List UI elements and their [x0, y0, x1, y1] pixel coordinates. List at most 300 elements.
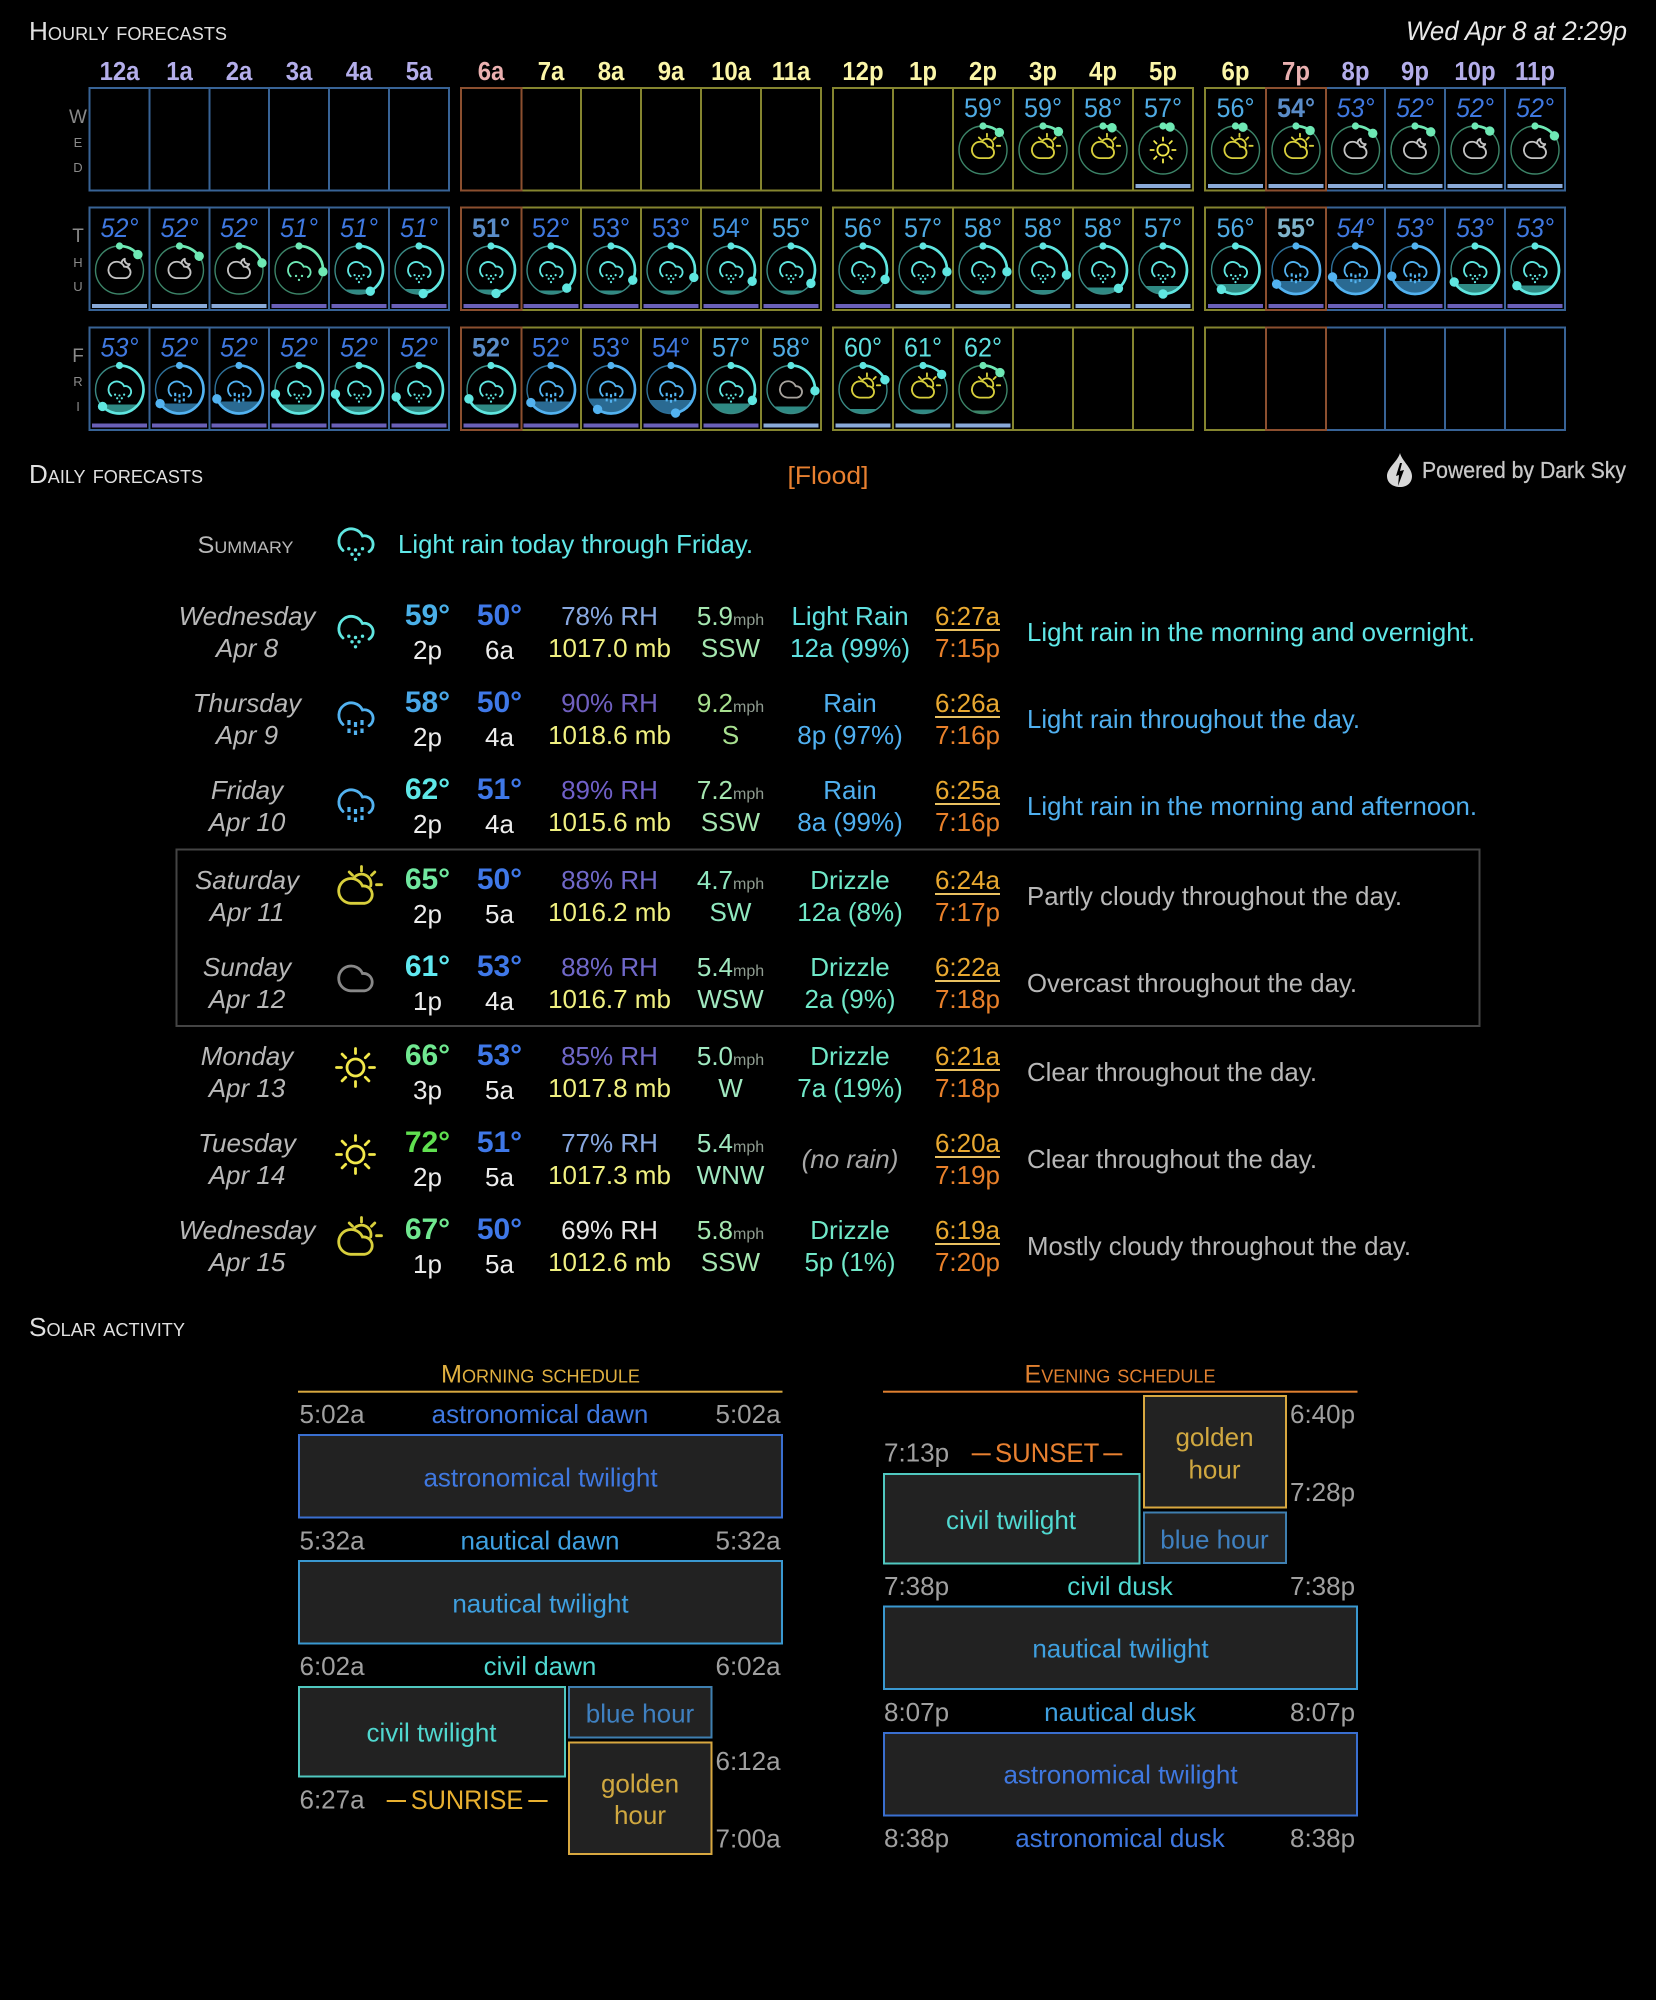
- hour cell: Thu 2a 52°: [212, 212, 268, 308]
- panel: morning schedule: astronomical dawn: [432, 1399, 648, 1429]
- daily row: Wednesday Apr 8: Apr 8: [214, 633, 279, 663]
- hour labels: 5a: [406, 57, 433, 86]
- hour cell: Thu 1p 57°: 57°: [904, 212, 942, 243]
- hour cell: Thu 7a 52°: [524, 212, 578, 308]
- daily row: Thursday Apr 9: Apr 9: [214, 720, 278, 750]
- hour cell: Wed 3p 59°: [1019, 92, 1067, 174]
- hour cell: Fri 1a 52°: [152, 332, 207, 428]
- hour cell: Wed 4p 58°: [1079, 92, 1127, 174]
- daily row: Wednesday Apr 15: 5p (1%): [804, 1247, 896, 1277]
- daily row: Tuesday Apr 14: 51°: [477, 1126, 522, 1159]
- hourly cells: Friday: [92, 332, 1010, 428]
- hour cell: Thu 8a 53°: 53°: [592, 212, 630, 243]
- hour cell: Thu 11a 55°: [764, 212, 818, 308]
- daily row: Thursday Apr 9: 4a: [485, 722, 514, 752]
- daily row: Sunday Apr 12: WSW: [697, 984, 764, 1014]
- daily row: Sunday Apr 12: 6:22a: [935, 952, 1001, 982]
- daily row: Sunday Apr 12: 1016.7 mb: [548, 984, 671, 1014]
- panel: morning schedule: 6:12a: [716, 1746, 781, 1776]
- daily row: Saturday Apr 11: [195, 863, 1402, 929]
- hour cell: Thu 7p 55°: [1268, 212, 1324, 308]
- panel: morning schedule: 5:32a: [716, 1525, 781, 1555]
- hour labels: 2a: [226, 57, 253, 86]
- powered by Dark Sky badge: Powered by Dark Sky: [1422, 457, 1626, 483]
- hour cell: Fri 11a 58°: 58°: [772, 332, 810, 363]
- hour cell: Thu 10a 54°: [704, 212, 759, 308]
- heading: daily forecasts: Daily forecasts: [29, 459, 203, 489]
- hour labels: 1a: [166, 57, 194, 86]
- daily row: Sunday Apr 12: Apr 12: [207, 984, 286, 1014]
- hour cell: Wed 5p 57°: [1136, 92, 1190, 188]
- panel: evening schedule: astronomical dusk: [1015, 1823, 1226, 1853]
- panel: morning schedule: nautical dawn: [460, 1525, 620, 1555]
- box: blue hour: [569, 1687, 712, 1738]
- daily row: Thursday Apr 9: 90% RH: [561, 688, 658, 718]
- day label: THU: U: [73, 279, 83, 294]
- daily row: Wednesday Apr 15: 69% RH: [561, 1215, 658, 1245]
- hour labels: 8a: [598, 57, 625, 86]
- daily row: Sunday Apr 12: 2a (9%): [804, 984, 896, 1014]
- panel: morning schedule: 6:27a: [300, 1784, 365, 1814]
- panel: evening schedule: civil dusk: [1067, 1571, 1174, 1601]
- daily row: Saturday Apr 11: Partly cloudy throughout the day.: [1027, 881, 1402, 911]
- daily row: Thursday Apr 9: Light rain throughout the day.: [1027, 704, 1360, 734]
- box: nautical twilight: [884, 1606, 1357, 1689]
- hour cell: Thu 3p 58°: 58°: [1024, 212, 1062, 243]
- day label: FRI: R: [73, 374, 83, 389]
- daily row: Saturday Apr 11: 65°: [405, 863, 450, 896]
- daily row: Saturday Apr 11: Apr 11: [208, 897, 284, 927]
- hour cell: Thu 11a 55°: 55°: [772, 212, 810, 243]
- hour cell: Fri 12a 53°: [92, 332, 147, 428]
- day label: WED: D: [73, 160, 83, 175]
- daily row: Wednesday Apr 15: 1012.6 mb: [548, 1247, 671, 1277]
- box: blue hour: [1144, 1512, 1286, 1563]
- hour cell: Wed 2p 59°: 59°: [964, 92, 1002, 123]
- day label: WED: E: [74, 135, 83, 150]
- daily row: Saturday Apr 11: 2p: [413, 899, 442, 929]
- daily row: Wednesday Apr 8: 6:27a: [935, 601, 1001, 631]
- hour cell: Thu 6a 51°: [464, 212, 518, 308]
- daily row: Thursday Apr 9: 9.2mph: [697, 688, 764, 718]
- hour cell: Wed 11p 52°: [1508, 92, 1562, 188]
- hour cell: Thu 4a 51°: [332, 212, 386, 308]
- panel: morning schedule: [298, 1361, 782, 1854]
- hour labels: 2p: [969, 57, 997, 86]
- panel: evening schedule: 6:40p: [1290, 1399, 1355, 1429]
- box: astronomical twilight: astronomical twilight: [1003, 1759, 1238, 1789]
- day label: THU: H: [73, 255, 83, 270]
- hour cell: Fri 3a 52°: 52°: [280, 332, 318, 363]
- daily row: Wednesday Apr 15: [179, 1213, 1411, 1279]
- hour cell: Wed 9p 52°: [1388, 92, 1442, 188]
- hour cell: Fri 11a 58°: [764, 332, 820, 428]
- hour cell: Fri 10a 57°: [704, 332, 759, 428]
- hourly grid: Wednesday row: [90, 88, 1565, 190]
- daily row: Thursday Apr 9: 1018.6 mb: [548, 720, 671, 750]
- hour cell: Fri 8a 53°: [584, 332, 638, 428]
- daily row: Tuesday Apr 14: 72°: [405, 1126, 450, 1159]
- hour cell: Thu 12a 52°: 52°: [101, 212, 138, 243]
- daily row: Thursday Apr 9: 6:26a: [935, 688, 1001, 718]
- daily row: Friday Apr 10: Apr 10: [207, 807, 286, 837]
- daily row: Sunday Apr 12: 1p: [413, 986, 442, 1016]
- daily row: Monday Apr 13: 5.0mph: [697, 1041, 764, 1071]
- daily row: Tuesday Apr 14: 5.4mph: [697, 1128, 764, 1158]
- hour cell: Thu 8a 53°: [584, 212, 639, 308]
- hour cell: Fri 9a 54°: 54°: [652, 332, 690, 363]
- hour cell: Wed 10p 52°: [1448, 92, 1502, 188]
- daily row: Wednesday Apr 8: 50°: [477, 599, 522, 632]
- daily row: Thursday Apr 9: Rain: [823, 688, 877, 718]
- daily row: Friday Apr 10: Rain: [823, 775, 877, 805]
- day label: FRI: I: [76, 399, 80, 414]
- daily row: Sunday Apr 12: Overcast throughout the day.: [1027, 968, 1357, 998]
- daily row: Thursday Apr 9: 7:16p: [935, 720, 1000, 750]
- box: golden hour: golden: [1175, 1422, 1254, 1452]
- hour cell: Thu 11p 53°: [1508, 212, 1562, 308]
- daily row: Tuesday Apr 14: Clear throughout the day.: [1027, 1144, 1317, 1174]
- hour cell: Wed 3p 59°: 59°: [1024, 92, 1062, 123]
- daily row: Monday Apr 13: 66°: [405, 1039, 450, 1072]
- hour cell: Fri 5a 52°: [390, 332, 446, 428]
- daily row: Saturday Apr 11: SW: [710, 897, 752, 927]
- hour labels: 9p: [1401, 57, 1429, 86]
- hour cell: Fri 7a 52°: 52°: [532, 332, 570, 363]
- box: astronomical twilight: astronomical twilight: [423, 1463, 658, 1493]
- hour cell: Wed 6p 56°: [1208, 92, 1263, 188]
- hour cell: Thu 8p 54°: [1327, 212, 1383, 308]
- daily row: Wednesday Apr 15: 6:19a: [935, 1215, 1001, 1245]
- hour labels: 11a: [772, 57, 811, 86]
- hour cell: Thu 6p 56°: 56°: [1217, 212, 1254, 243]
- daily row: Tuesday Apr 14: 2p: [413, 1162, 442, 1192]
- hour cell: Thu 9a 53°: [644, 212, 700, 308]
- hour cell: Wed 8p 53°: 53°: [1337, 92, 1374, 123]
- daily row: Tuesday Apr 14: 7:19p: [935, 1160, 1000, 1190]
- morning heading: Morning schedule: [441, 1361, 640, 1389]
- daily row: Friday Apr 10: 6:25a: [935, 775, 1001, 805]
- hour labels: 10p: [1454, 57, 1496, 86]
- hour cell: Thu 5p 57°: [1136, 212, 1190, 308]
- hour cell: Thu 3a 51°: [272, 212, 328, 308]
- daily row: Wednesday Apr 8: 78% RH: [561, 601, 658, 631]
- daily row: Tuesday Apr 14: 77% RH: [561, 1128, 658, 1158]
- hour labels: 10a: [711, 57, 752, 86]
- hour labels: 11p: [1515, 57, 1555, 86]
- panel: evening schedule: nautical dusk: [1044, 1697, 1197, 1727]
- panel: evening schedule: [883, 1361, 1358, 1853]
- daily row: Sunday Apr 12: [203, 950, 1357, 1016]
- sunrise marker: SUNRISE: [411, 1785, 523, 1815]
- hour labels: 3a: [286, 57, 313, 86]
- hour cell: Wed 7p 54°: 54°: [1277, 92, 1315, 123]
- daily row: Wednesday Apr 15: Wednesday: [179, 1215, 317, 1245]
- daily row: Wednesday Apr 8: 12a (99%): [790, 633, 910, 663]
- box: nautical twilight: nautical twilight: [1032, 1633, 1209, 1663]
- panel: morning schedule: 5:02a: [300, 1399, 365, 1429]
- hour labels: 5p: [1149, 57, 1177, 86]
- daily row: Tuesday Apr 14: 1017.3 mb: [548, 1160, 671, 1190]
- panel: evening schedule: 7:13p: [884, 1438, 949, 1468]
- hour cell: Fri 2a 52°: [211, 332, 266, 428]
- hour cell: Fri 3a 52°: [270, 332, 326, 428]
- daily row: Saturday Apr 11: 50°: [477, 863, 522, 896]
- hour labels: [100, 57, 1555, 86]
- day label: WED: [69, 107, 87, 175]
- daily row: Friday Apr 10: [207, 773, 1477, 839]
- hour cell: Thu 5a 51°: 51°: [400, 212, 438, 243]
- daily row: Saturday Apr 11: 1016.2 mb: [548, 897, 671, 927]
- hour labels: 7p: [1282, 57, 1310, 86]
- daily row: Monday Apr 13: 3p: [413, 1075, 442, 1105]
- daily row: Friday Apr 10: 62°: [405, 773, 450, 806]
- daily row: Wednesday Apr 8: SSW: [701, 633, 761, 663]
- daily row: Wednesday Apr 15: Apr 15: [207, 1247, 286, 1277]
- day label: FRI: [72, 346, 84, 414]
- daily row: Wednesday Apr 15: Mostly cloudy throughout the day.: [1027, 1231, 1411, 1261]
- daily row: Friday Apr 10: 51°: [477, 773, 522, 806]
- hour labels: 4a: [346, 57, 373, 86]
- daily row: Tuesday Apr 14: Tuesday: [198, 1128, 298, 1158]
- panel: evening schedule: 7:38p: [884, 1571, 949, 1601]
- hour cell: Thu 2a 52°: 52°: [220, 212, 258, 243]
- hour cell: Thu 6p 56°: [1208, 212, 1263, 308]
- daily row: Saturday Apr 11: 5a: [485, 899, 514, 929]
- hourly cells: Wednesday: [959, 92, 1562, 188]
- hour cell: Thu 6a 51°: 51°: [472, 212, 510, 243]
- daily row: Wednesday Apr 8: 5.9mph: [697, 601, 764, 631]
- daily row: Thursday Apr 9: 58°: [405, 686, 450, 719]
- daily row: Sunday Apr 12: 5.4mph: [697, 952, 764, 982]
- daily row: Thursday Apr 9: Thursday: [193, 688, 303, 718]
- daily row: Monday Apr 13: Apr 13: [207, 1073, 286, 1103]
- daily row: Wednesday Apr 8: 1017.0 mb: [548, 633, 671, 663]
- hour cell: Thu 7a 52°: 52°: [532, 212, 570, 243]
- hour cell: Fri 8a 53°: 53°: [592, 332, 630, 363]
- daily row: Monday Apr 13: [201, 1039, 1317, 1105]
- hour labels: 6p: [1222, 57, 1249, 86]
- daily row: Monday Apr 13: 1017.8 mb: [548, 1073, 671, 1103]
- daily row: Sunday Apr 12: Sunday: [203, 952, 293, 982]
- hour cell: Wed 10p 52°: 52°: [1456, 92, 1494, 123]
- icon: Dark Sky drop: [1387, 453, 1412, 487]
- hour cell: Thu 12p 56°: 56°: [844, 212, 882, 243]
- daily row: Tuesday Apr 14: Apr 14: [207, 1160, 285, 1190]
- hour cell: Thu 2p 58°: 58°: [964, 212, 1002, 243]
- hour cell: Wed 9p 52°: 52°: [1396, 92, 1434, 123]
- heading: hourly forecasts: Hourly forecasts: [29, 16, 227, 46]
- daily row: Friday Apr 10: 7.2mph: [697, 775, 764, 805]
- daily row: Friday Apr 10: 2p: [413, 809, 442, 839]
- hour cell: Fri 1p 61°: [896, 332, 950, 428]
- hour cell: Wed 6p 56°: 56°: [1217, 92, 1254, 123]
- day label: THU: [72, 226, 84, 294]
- daily row: Friday Apr 10: 89% RH: [561, 775, 658, 805]
- panel: evening schedule: 7:38p: [1290, 1571, 1355, 1601]
- daily row: Monday Apr 13: Clear throughout the day.: [1027, 1057, 1317, 1087]
- daily row: Saturday Apr 11: 12a (8%): [797, 897, 903, 927]
- box: nautical twilight: nautical twilight: [452, 1589, 629, 1619]
- hour cell: Thu 11p 53°: 53°: [1516, 212, 1554, 243]
- panel: morning schedule: civil dawn: [484, 1651, 596, 1681]
- hour cell: Fri 1p 61°: 61°: [904, 332, 942, 363]
- weekly summary: [198, 529, 753, 559]
- daily row: Tuesday Apr 14: (no rain): [802, 1144, 898, 1174]
- hour cell: Thu 10a 54°: 54°: [712, 212, 750, 243]
- hour labels: 4p: [1089, 57, 1117, 86]
- hour cell: Thu 12a 52°: [92, 212, 147, 308]
- daily row: Wednesday Apr 15: Drizzle: [810, 1215, 890, 1245]
- box: blue hour: blue hour: [1160, 1524, 1269, 1554]
- panel: morning schedule: 5:02a: [716, 1399, 781, 1429]
- daily row: Sunday Apr 12: 4a: [485, 986, 514, 1016]
- weekend highlight box: [176, 850, 1480, 1026]
- daily row: Friday Apr 10: 8a (99%): [797, 807, 903, 837]
- panel: morning schedule: 7:00a: [716, 1823, 781, 1853]
- daily row: Saturday Apr 11: Saturday: [195, 865, 301, 895]
- daily row: Monday Apr 13: 7a (19%): [797, 1073, 903, 1103]
- daily row: Wednesday Apr 8: Light rain in the morning and overnight.: [1027, 617, 1475, 647]
- daily row: Thursday Apr 9: 50°: [477, 686, 522, 719]
- daily row: Friday Apr 10: 7:16p: [935, 807, 1000, 837]
- hour cell: Thu 4a 51°: 51°: [340, 212, 378, 243]
- hour cell: Thu 1a 52°: 52°: [161, 212, 198, 243]
- daily row: Thursday Apr 9: 2p: [413, 722, 442, 752]
- hour cell: Thu 8p 54°: 54°: [1337, 212, 1374, 243]
- hour cell: Thu 7p 55°: 55°: [1277, 212, 1315, 243]
- daily row: Sunday Apr 12: 88% RH: [561, 952, 658, 982]
- panel: evening schedule: 8:07p: [1290, 1697, 1355, 1727]
- daily row: Saturday Apr 11: 6:24a: [935, 865, 1001, 895]
- hour labels: 7a: [538, 57, 565, 86]
- weekly summary: Light rain today through Friday.: [398, 529, 753, 559]
- daily row: Monday Apr 13: Drizzle: [810, 1041, 890, 1071]
- daily row: Monday Apr 13: 6:21a: [935, 1041, 1001, 1071]
- box: nautical twilight: [299, 1561, 782, 1644]
- hour cell: Thu 10p 53°: 53°: [1456, 212, 1494, 243]
- panel: morning schedule: 6:02a: [716, 1651, 781, 1681]
- hour cell: Fri 12p 60°: 60°: [844, 332, 882, 363]
- daily row: Wednesday Apr 15: SSW: [701, 1247, 761, 1277]
- hour cell: Thu 3a 51°: 51°: [280, 212, 318, 243]
- daily row: Saturday Apr 11: 4.7mph: [697, 865, 764, 895]
- hour cell: Thu 4p 58°: [1076, 212, 1130, 308]
- box: golden hour: [1144, 1396, 1286, 1508]
- box: blue hour: blue hour: [586, 1699, 695, 1729]
- hour cell: Thu 4p 58°: 58°: [1084, 212, 1122, 243]
- hour cell: Fri 9a 54°: [644, 332, 698, 428]
- panel: evening schedule: 7:28p: [1290, 1477, 1355, 1507]
- panel: evening schedule: 8:38p: [1290, 1823, 1355, 1853]
- daily row: Wednesday Apr 8: 2p: [413, 635, 442, 665]
- daily row: Friday Apr 10: Light rain in the morning and afternoon.: [1027, 791, 1477, 821]
- daily row: Friday Apr 10: 1015.6 mb: [548, 807, 671, 837]
- box: astronomical twilight: [884, 1733, 1357, 1816]
- daily row: Wednesday Apr 8: Wednesday: [179, 601, 317, 631]
- daily row: Wednesday Apr 15: 7:20p: [935, 1247, 1000, 1277]
- hourly grid: Thursday row: [90, 208, 1565, 310]
- daily row: Friday Apr 10: 4a: [485, 809, 514, 839]
- daily row: Saturday Apr 11: 88% RH: [561, 865, 658, 895]
- evening heading: Evening schedule: [1024, 1361, 1216, 1389]
- daily row: Wednesday Apr 8: 7:15p: [935, 633, 1000, 663]
- hour cell: Fri 2a 52°: 52°: [220, 332, 258, 363]
- box: astronomical twilight: [299, 1435, 782, 1518]
- hour cell: Fri 12a 53°: 53°: [101, 332, 138, 363]
- daily row: Wednesday Apr 15: 1p: [413, 1249, 442, 1279]
- hour cell: Thu 1p 57°: [896, 212, 952, 308]
- day label: THU: T: [72, 226, 84, 247]
- hour cell: Fri 10a 57°: 57°: [712, 332, 750, 363]
- hour cell: Wed 5p 57°: 57°: [1144, 92, 1182, 123]
- hour cell: Wed 2p 59°: [959, 92, 1007, 174]
- hour cell: Thu 12p 56°: [836, 212, 891, 308]
- daily row: Wednesday Apr 15: 5.8mph: [697, 1215, 764, 1245]
- daily row: Sunday Apr 12: 7:18p: [935, 984, 1000, 1014]
- daily row: Wednesday Apr 15: 50°: [477, 1213, 522, 1246]
- hour cell: Fri 2p 62°: 62°: [964, 332, 1002, 363]
- panel: evening schedule: 8:07p: [884, 1697, 949, 1727]
- hourly cells: Thursday: [92, 212, 1562, 308]
- daily row: Tuesday Apr 14: [198, 1126, 1317, 1192]
- daily row: Wednesday Apr 15: 5a: [485, 1249, 514, 1279]
- box: golden hour: hour: [1188, 1454, 1241, 1484]
- hour labels: 12p: [842, 57, 884, 86]
- daily row: Sunday Apr 12: 53°: [477, 950, 522, 983]
- daily row: Thursday Apr 9: 8p (97%): [797, 720, 903, 750]
- daily row: Friday Apr 10: SSW: [701, 807, 761, 837]
- hour cell: Fri 4a 52°: [330, 332, 386, 428]
- daily row: Monday Apr 13: 85% RH: [561, 1041, 658, 1071]
- box: civil twilight: [884, 1474, 1140, 1564]
- daily row: Wednesday Apr 8: 6a: [485, 635, 514, 665]
- daily row: Tuesday Apr 14: 6:20a: [935, 1128, 1001, 1158]
- daily row: Tuesday Apr 14: 5a: [485, 1162, 514, 1192]
- hour cell: Thu 3p 58°: [1016, 212, 1072, 308]
- box: civil twilight: [299, 1687, 565, 1776]
- hour labels: 1p: [909, 57, 937, 86]
- day label: FRI: F: [72, 346, 84, 367]
- hour cell: Fri 2p 62°: [956, 332, 1010, 428]
- daily row: Monday Apr 13: 53°: [477, 1039, 522, 1072]
- hour cell: Thu 5a 51°: [392, 212, 446, 308]
- daily row: Thursday Apr 9: [193, 686, 1360, 752]
- daily row: Sunday Apr 12: Drizzle: [810, 952, 890, 982]
- daily row: Wednesday Apr 8: [179, 599, 1475, 665]
- daily row: Saturday Apr 11: 7:17p: [935, 897, 1000, 927]
- daily row: Thursday Apr 9: S: [722, 720, 739, 750]
- hour labels: 3p: [1029, 57, 1057, 86]
- panel: morning schedule: 5:32a: [300, 1525, 365, 1555]
- hour cell: Wed 7p 54°: [1268, 92, 1324, 188]
- hour cell: Fri 6a 52°: 52°: [472, 332, 510, 363]
- daily row: Monday Apr 13: W: [718, 1073, 743, 1103]
- hour cell: Thu 2p 58°: [956, 212, 1012, 308]
- hour cell: Thu 10p 53°: [1448, 212, 1502, 308]
- hour labels: 8p: [1342, 57, 1369, 86]
- daily row: Monday Apr 13: 7:18p: [935, 1073, 1000, 1103]
- flood alert: [Flood]: [788, 462, 868, 490]
- hour cell: Wed 8p 53°: [1328, 92, 1383, 188]
- panel: morning schedule: 6:02a: [300, 1651, 365, 1681]
- box: golden hour: golden: [601, 1769, 679, 1799]
- hour cell: Thu 1a 52°: [152, 212, 207, 308]
- daily row: Friday Apr 10: Friday: [211, 775, 285, 805]
- daily row: Tuesday Apr 14: WNW: [697, 1160, 765, 1190]
- box: civil twilight: civil twilight: [366, 1718, 497, 1748]
- hour cell: Fri 6a 52°: [463, 332, 518, 428]
